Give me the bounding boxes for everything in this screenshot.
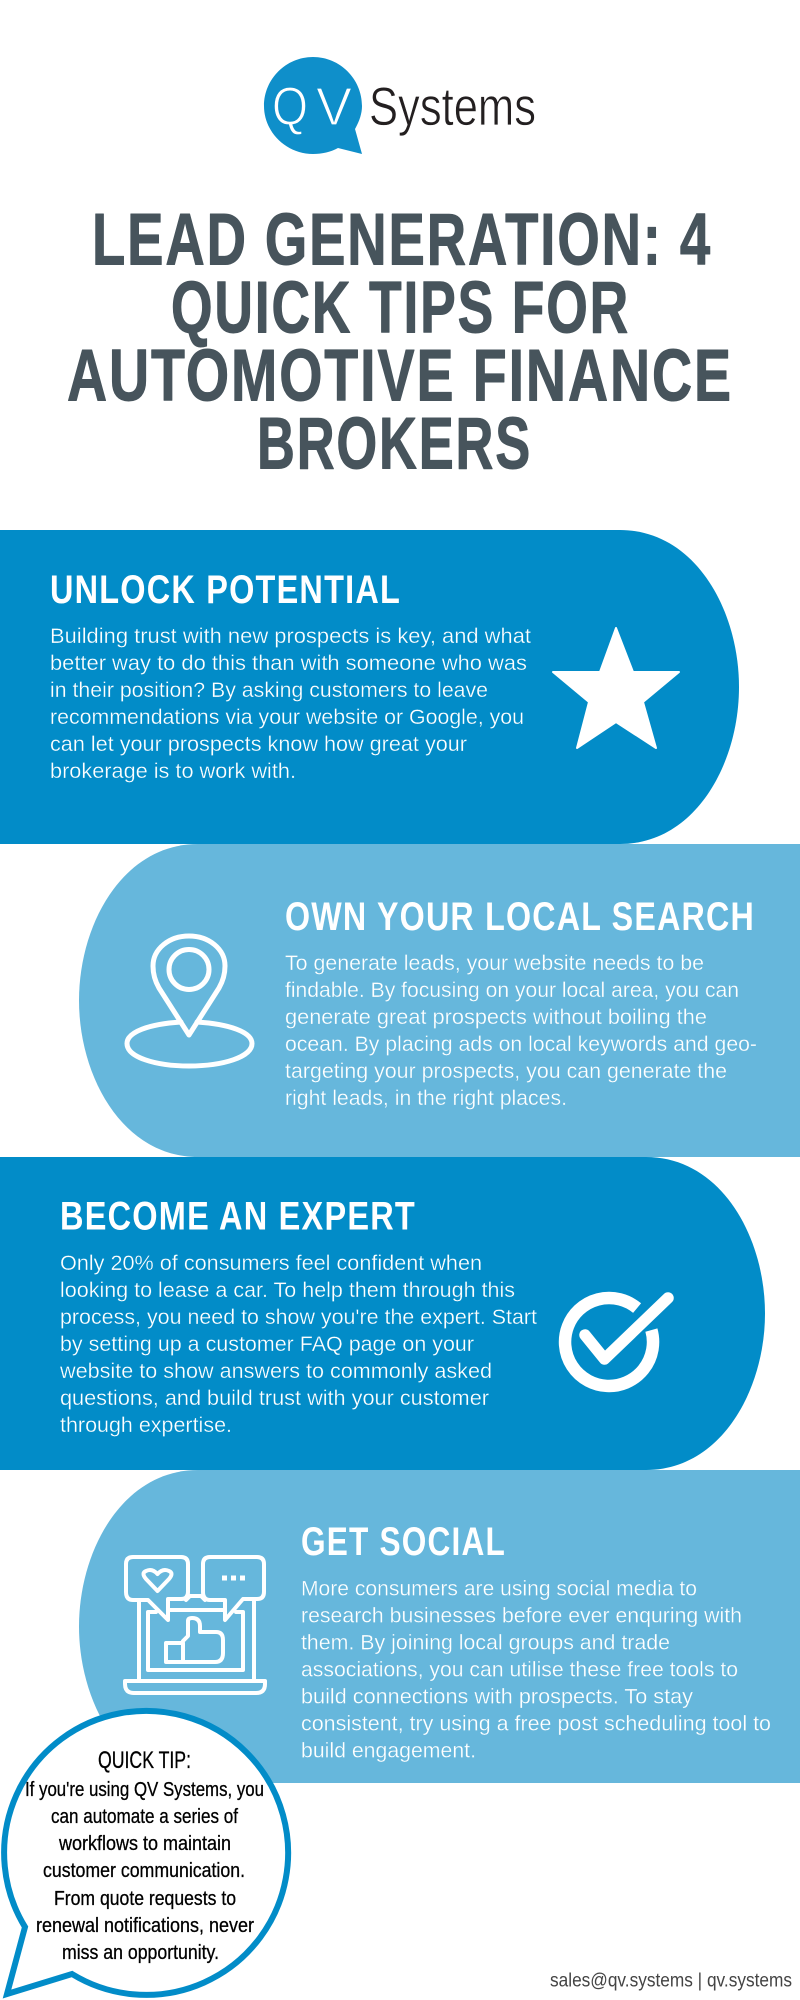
logo speech bubble [264, 57, 362, 154]
title: QUICK TIPS FOR [171, 268, 630, 348]
icon: check mark [565, 1298, 668, 1386]
callout text: From quote requests to [54, 1887, 236, 1910]
heading: unlock potential: UNLOCK POTENTIAL [50, 568, 401, 612]
logo Q and V letters: V [316, 77, 352, 137]
text: social body: research businesses before ever enquring with [301, 1604, 742, 1628]
text: expert body: Only 20% of consumers feel confident when [60, 1251, 482, 1275]
heading: get social: GET SOCIAL [301, 1520, 506, 1564]
icon: social media laptop [125, 1557, 265, 1693]
text: local search body: To generate leads, your website needs to be [285, 951, 704, 975]
text: unlock potential body: can let your prospects know how great your [50, 732, 467, 756]
text: expert body: looking to lease a car. To help them through this [60, 1278, 515, 1302]
text: expert body: questions, and build trust with your customer [60, 1386, 489, 1410]
logo Q and V letters [272, 77, 352, 137]
logo wordmark: Systems [369, 77, 536, 137]
text: social body: consistent, try using a free post scheduling tool to [301, 1712, 771, 1736]
callout text [25, 1778, 264, 1964]
logo: QV Systems [264, 57, 536, 154]
text: local search body: findable. By focusing on your local area, you can [285, 978, 739, 1002]
callout text: customer communication. [43, 1859, 245, 1882]
text: social body: build engagement. [301, 1738, 476, 1762]
text: social body [301, 1576, 771, 1762]
text: unlock potential body: Building trust with new prospects is key, and what [50, 624, 531, 648]
title [67, 200, 733, 484]
title: BROKERS [257, 404, 532, 484]
callout text: workflows to maintain [58, 1832, 231, 1855]
text: expert body: by setting up a customer FAQ page on your [60, 1332, 474, 1356]
text: expert body [59, 1251, 537, 1437]
text: unlock potential body: brokerage is to work with. [50, 759, 296, 783]
text: expert body: website to show answers to commonly asked [59, 1359, 492, 1383]
panel: own your local search [79, 844, 800, 1157]
callout text: renewal notifications, never [36, 1914, 254, 1937]
icon: star [553, 628, 679, 748]
text: social body: them. By joining local groups and trade [301, 1630, 670, 1654]
text: social body: build connections with prospects. To stay [301, 1684, 693, 1708]
panel: become an expert [0, 1157, 765, 1470]
callout text: can automate a series of [51, 1805, 238, 1828]
text: unlock potential body: better way to do this than with someone who was [50, 651, 527, 675]
text: expert body: process, you need to show you're the expert. Start [60, 1305, 537, 1329]
panel: unlock potential [0, 530, 739, 844]
text: social body: associations, you can utilise these free tools to [301, 1658, 738, 1682]
text: local search body: ocean. By placing ads on local keywords and geo- [285, 1032, 757, 1056]
panel: get social [79, 1470, 800, 1783]
text: expert body: through expertise. [60, 1413, 232, 1437]
text: local search body: generate great prospects without boiling the [285, 1005, 707, 1029]
text: unlock potential body [50, 624, 531, 783]
text: local search body: targeting your prospects, you can generate the [285, 1059, 727, 1083]
text: social body: More consumers are using social media to [301, 1576, 697, 1600]
text: unlock potential body: in their position? By asking customers to leave [50, 678, 488, 702]
heading: become an expert: BECOME AN EXPERT [60, 1194, 416, 1238]
callout text: If you're using QV Systems, you [25, 1778, 264, 1801]
text: local search body: right leads, in the right places. [285, 1086, 567, 1110]
icon: map pin [127, 936, 252, 1066]
logo Q and V letters: Q [272, 77, 308, 137]
callout: quick tip speech bubble [4, 1711, 288, 1995]
callout text: miss an opportunity. [62, 1941, 219, 1964]
text: unlock potential body: recommendations via your website or Google, you [50, 705, 524, 729]
callout heading: QUICK TIP: [98, 1747, 191, 1774]
text: local search body [285, 951, 757, 1110]
